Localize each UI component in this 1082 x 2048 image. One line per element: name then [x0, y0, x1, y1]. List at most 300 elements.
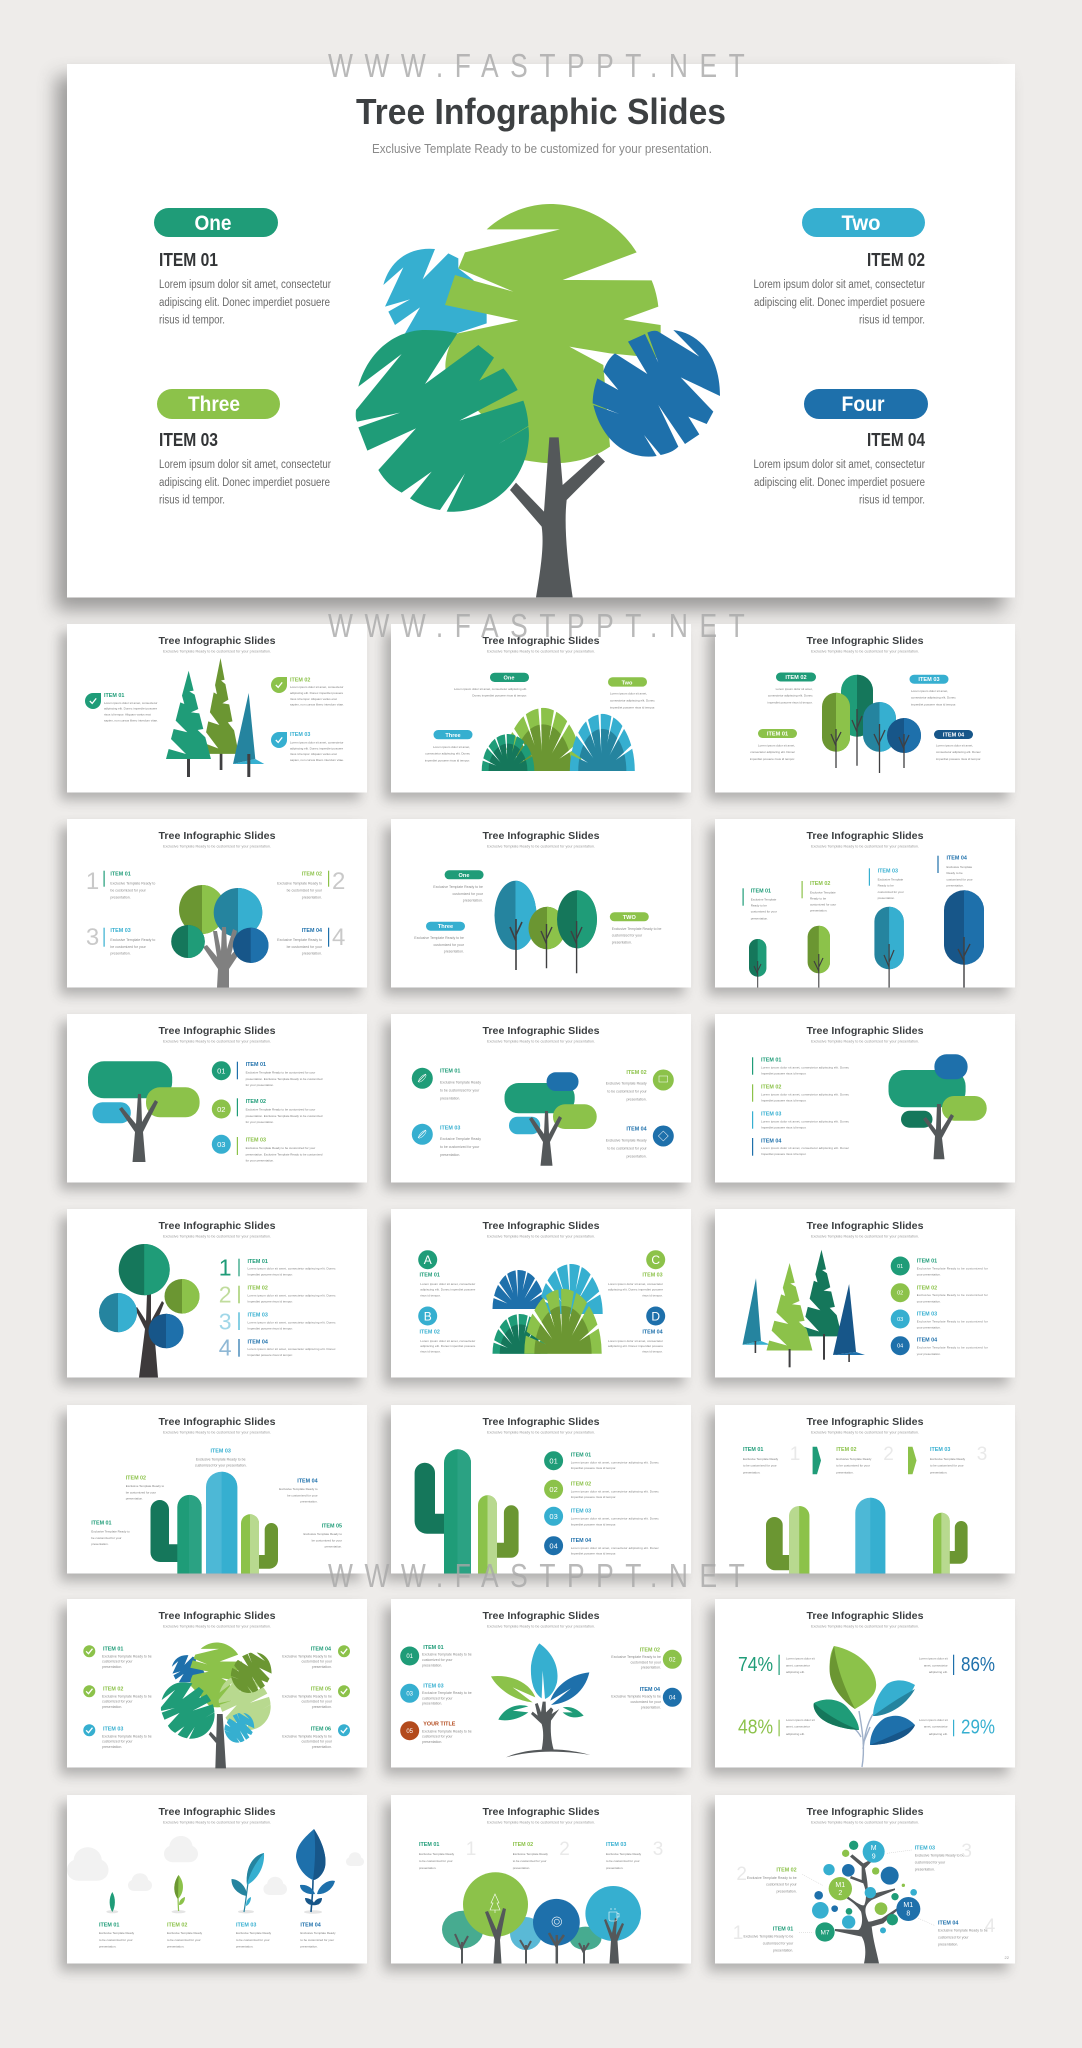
- stat 48%: 48%: [738, 1716, 773, 1738]
- item texts: presentation.: [878, 896, 895, 900]
- item 01: ITEM 01: [246, 1062, 266, 1068]
- items: 02: [897, 1291, 903, 1297]
- panel: slide 16 monstera tree six items: Tree Infographic Slides: [158, 1610, 276, 1622]
- item B: [418, 1306, 476, 1354]
- text: item 03: risus id tempor.: [159, 494, 225, 506]
- stat 29%: 29%: [961, 1716, 995, 1738]
- item 03: presentation.: [440, 1153, 460, 1157]
- item row: presentation.: [743, 1470, 761, 1474]
- item row: ITEM 01: [743, 1447, 763, 1453]
- bubble labels: 9: [872, 1854, 876, 1860]
- panel: slide 13 cactus five items: Tree Infographic Slides: [158, 1416, 276, 1428]
- item A: ITEM 01: [420, 1273, 440, 1279]
- stat 29%: [919, 1716, 995, 1738]
- numbered list: Imperdiet posuere risus id tempor.: [571, 1522, 616, 1526]
- item 01: Lorem ipsum dolor sit amet, consectetur: [104, 701, 157, 705]
- icon: clouds: [67, 1836, 364, 1895]
- panel: slide 9 item list with block tree: Exclusive Template Ready to be customized for your presentation.: [811, 1040, 919, 1044]
- item 02: sapien, non cursus libero interdum vitae.: [290, 702, 344, 706]
- items: [219, 1255, 336, 1360]
- item 04: to be customized for your: [607, 1146, 648, 1150]
- item 03: to be customized for your: [440, 1145, 480, 1149]
- item labels: 3: [653, 1839, 663, 1860]
- right items: ITEM 04: [311, 1647, 331, 1653]
- item 01: [733, 1923, 794, 1953]
- text: item 02: adipiscing elit. Donec imperdiet posuere: [754, 297, 925, 309]
- item 01: for your presentation.: [246, 1083, 274, 1087]
- items right: ITEM 02: [640, 1648, 660, 1654]
- items: 4: [219, 1334, 232, 1360]
- watermark top: WWW.FASTPPT.NET: [328, 48, 745, 85]
- text: item 04: Lorem ipsum dolor sit amet, consectetur: [754, 459, 925, 471]
- item 03: Lorem ipsum dolor sit amet, consectetur: [290, 740, 343, 744]
- left items: Exclusive Template Ready to be: [102, 1654, 152, 1658]
- panel: slide 3 four capsule trees: [715, 624, 1015, 792]
- items: ITEM 01: [91, 1521, 112, 1527]
- item 03: risus id tempor. Aliquam varius erat: [290, 752, 337, 756]
- numbered list: ITEM 01: [571, 1452, 591, 1458]
- item 04: Exclusive Template Ready: [606, 1138, 647, 1142]
- item 02: for your presentation.: [246, 1120, 274, 1124]
- numbered list: Lorem ipsum dolor sit amet, consectetur adipiscing elit. Donec: [571, 1489, 659, 1493]
- items right: customized for your: [630, 1700, 662, 1704]
- items: your presentation.: [917, 1299, 941, 1303]
- text two: consectetur adipiscing elit. Donec: [610, 698, 655, 702]
- stat 86%: 86%: [961, 1654, 995, 1676]
- stat 29%: amet, consectetur: [924, 1725, 948, 1729]
- body texts: consectetur adipiscing elit. Donec: [936, 750, 981, 754]
- stat 74%: Lorem ipsum dolor sit: [786, 1656, 815, 1660]
- icon: capsule trees: [822, 675, 921, 773]
- items: be customized for your: [91, 1536, 122, 1540]
- panel: slide 19 growing plants: Tree Infographic Slides: [158, 1806, 276, 1818]
- body texts: presentation.: [463, 899, 483, 903]
- text: item 01: adipiscing elit. Donec imperdiet posuere: [159, 297, 330, 309]
- connectors: [799, 1850, 935, 1933]
- items: Imperdiet posuere risus id tempor.: [248, 1273, 293, 1277]
- item 04: [606, 1126, 674, 1158]
- item 03: 03: [217, 1140, 225, 1149]
- items right: Exclusive Template Ready to be: [611, 1655, 661, 1659]
- numbered list: [544, 1451, 659, 1556]
- item row: 2: [883, 1444, 894, 1465]
- items: 01: [897, 1264, 903, 1270]
- item 03: 3: [86, 924, 99, 951]
- body texts: customized for your: [452, 892, 484, 896]
- panel: slide 17 hand tree with leaves: [391, 1599, 691, 1768]
- numbered list: Imperdiet posuere risus id tempor.: [571, 1552, 616, 1556]
- stat 74%: amet, consectetur: [786, 1664, 810, 1668]
- right items: Exclusive Template Ready to be: [282, 1694, 332, 1698]
- panel: slide 9 item list with block tree: [715, 1014, 1015, 1182]
- item 03: ITEM 03: [440, 1125, 460, 1131]
- pill: Four: Four: [842, 393, 884, 416]
- items: Exclusive Template Ready to be: [196, 1458, 246, 1462]
- item labels: presentation.: [513, 1866, 530, 1870]
- panel: slide 2 bushes with pills: Exclusive Template Ready to be customized for your presentation.: [487, 650, 595, 654]
- left items: Exclusive Template Ready to be: [102, 1734, 152, 1738]
- item labels: [99, 1922, 336, 1949]
- pill one: [490, 673, 529, 682]
- text: item 04: ITEM 04: [867, 430, 925, 450]
- page number: 22: [1004, 1955, 1010, 1960]
- item 03: adipiscing elit. Donec imperdiet posuere: [290, 746, 344, 750]
- panel: slide 8 block tree with icon circles: Tree Infographic Slides: [482, 1025, 600, 1037]
- items: ITEM 04: [297, 1478, 318, 1484]
- text: item 03: adipiscing elit. Donec imperdiet posuere: [159, 477, 330, 489]
- item C: ITEM 03: [642, 1273, 663, 1279]
- icon: circle tree: [99, 1244, 200, 1378]
- panel: slide 12 pines with circles: Tree Infographic Slides: [806, 1220, 924, 1232]
- item labels: Exclusive Template Ready: [300, 1931, 336, 1935]
- left items: presentation.: [102, 1705, 122, 1709]
- items left: 05: [406, 1729, 414, 1735]
- item list: Lorem ipsum dolor sit amet, consectetur adipiscing elit. Donec: [761, 1146, 850, 1150]
- item 02: Exclusive Template Ready: [606, 1082, 647, 1086]
- panel: slide 20 round trees with icons: Exclusive Template Ready to be customized for your presentation.: [487, 1820, 595, 1824]
- panel: slide 3 four capsule trees: Tree Infographic Slides: [806, 635, 924, 647]
- items: ITEM 03: [917, 1311, 937, 1317]
- item 01: risus id tempor. Aliquam varius erat: [104, 712, 151, 716]
- items right: ITEM 04: [640, 1687, 660, 1693]
- item 02: [606, 1070, 674, 1102]
- left items: ITEM 01: [103, 1647, 123, 1653]
- items right: customized for your: [630, 1660, 662, 1664]
- item labels: ITEM 04: [300, 1922, 321, 1928]
- panel: main tree slide: [67, 64, 1015, 598]
- item 03: [86, 924, 155, 956]
- items: be customized for your: [312, 1538, 342, 1542]
- item texts: presentation.: [810, 909, 828, 913]
- items: Exclusive Template Ready to: [91, 1530, 130, 1534]
- panel: slide 1 three pines with checks: Exclusive Template Ready to be customized for your presentation.: [163, 650, 271, 654]
- panel: slide 6 growing capsule trees: Exclusive Template Ready to be customized for your presentation.: [811, 844, 919, 848]
- text: item 02: [754, 250, 925, 326]
- panel: slide 20 round trees with icons: Tree Infographic Slides: [482, 1806, 600, 1818]
- items: Exclusive Template Ready to: [304, 1532, 342, 1536]
- panel: slide 10 circle tree with numerals: Exclusive Template Ready to be customized for your presentation.: [163, 1234, 271, 1238]
- subtitle: Exclusive Template Ready to be customized for your presentation.: [372, 141, 712, 156]
- items left: Exclusive Template Ready to be: [422, 1653, 472, 1657]
- pill: Three: [157, 389, 280, 419]
- item labels: to be customized for your: [513, 1859, 546, 1863]
- numbered list: ITEM 04: [571, 1538, 591, 1544]
- body texts: imperdiet posuere risus id tempor.: [750, 757, 795, 761]
- item 03: [271, 732, 344, 762]
- body texts: Exclusive Template Ready to be: [612, 927, 661, 931]
- panel: slide 18 leaves with percentages: Exclusive Template Ready to be customized for your presentation.: [811, 1624, 919, 1628]
- item 01: to be customized for your: [440, 1088, 480, 1092]
- pill: One: [154, 208, 278, 237]
- right items: ITEM 05: [311, 1687, 331, 1693]
- panel: slide 6 growing capsule trees: [715, 819, 1015, 988]
- item 04: presentation.: [302, 952, 322, 956]
- icon: monstera leaf tree: [356, 204, 720, 597]
- item 02: presentation.: [776, 1890, 797, 1894]
- text: item 02: ITEM 02: [867, 250, 925, 270]
- item D: ITEM 04: [642, 1329, 663, 1335]
- item labels: Exclusive Template Ready: [513, 1852, 548, 1856]
- icon: oval trees: [494, 881, 597, 973]
- item D: adipiscing elit. Donec imperdiet posuere: [608, 1344, 663, 1348]
- item row: to be customized for your: [743, 1463, 777, 1467]
- title: Tree Infographic Slides: [356, 91, 726, 132]
- items: 1: [219, 1255, 232, 1281]
- item 01: [412, 1068, 481, 1100]
- item B: Lorem ipsum dolor sit amet, consectetur: [420, 1339, 475, 1343]
- item C: adipiscing elit. Donec imperdiet posuere: [608, 1288, 663, 1292]
- text three: imperdiet posuere risus id tempor.: [425, 759, 470, 763]
- panel: slide 5 three oval trees: [391, 819, 691, 988]
- body texts: imperdiet posuere risus id tempor.: [936, 757, 981, 761]
- panel: slide 14 cactus with numbered list: Exclusive Template Ready to be customized for your presentation.: [487, 1430, 595, 1434]
- item 01: 01: [217, 1067, 225, 1076]
- item A: adipiscing elit. Donec imperdiet posuere: [420, 1288, 476, 1292]
- item 01: adipiscing elit. Donec imperdiet posuere: [104, 707, 158, 711]
- items right: presentation.: [641, 1705, 661, 1709]
- items: Lorem ipsum dolor sit amet, consectetur adipiscing elit. Donec: [248, 1321, 336, 1325]
- item 04: be customized for your: [287, 945, 323, 949]
- text: item 01: Lorem ipsum dolor sit amet, consectetur: [159, 279, 331, 291]
- body texts: Lorem ipsum dolor sit amet,: [936, 744, 973, 748]
- item 03: presentation.: [110, 952, 131, 956]
- stat 86%: amet, consectetur: [924, 1664, 948, 1668]
- icon: round trees: [442, 1872, 641, 1964]
- body texts: Lorem ipsum dolor sit amet,: [911, 689, 948, 693]
- stat 29%: Lorem ipsum dolor sit: [919, 1718, 948, 1722]
- items left: ITEM 01: [423, 1645, 444, 1651]
- item 04: ITEM 04: [302, 928, 322, 934]
- item 04: [277, 924, 345, 956]
- item row: Exclusive Template Ready: [743, 1457, 779, 1461]
- item D: Lorem ipsum dolor sit amet, consectetur: [608, 1339, 663, 1343]
- panel: slide 7 flat tree with numbered circles: Tree Infographic Slides: [158, 1025, 276, 1037]
- item texts: Ready to be: [878, 884, 894, 888]
- stat 48%: [738, 1716, 815, 1738]
- items: customized for your presentation.: [195, 1464, 247, 1468]
- panel: slide 20 round trees with icons: [391, 1795, 691, 1964]
- panel: slide 7 flat tree with numbered circles: Exclusive Template Ready to be customized for your presentation.: [163, 1040, 271, 1044]
- items: presentation.: [325, 1545, 342, 1549]
- item 04: ITEM 04: [938, 1920, 958, 1926]
- items: Imperdiet posuere risus id tempor.: [248, 1353, 293, 1357]
- panel: slide 21 circle bubble tree: Exclusive Template Ready to be customized for your presentation.: [811, 1820, 919, 1824]
- panel: slide 13 cactus five items: Exclusive Template Ready to be customized for your presentation.: [163, 1430, 271, 1434]
- panel: slide 12 pines with circles: [715, 1209, 1015, 1378]
- text three: consectetur adipiscing elit. Donec: [425, 752, 470, 756]
- item 04: 4: [332, 924, 345, 951]
- numbered list: Imperdiet posuere risus id tempor.: [571, 1466, 616, 1470]
- watermark lower: WWW.FASTPPT.NET: [328, 1558, 745, 1595]
- panel: slide 5 three oval trees: Exclusive Template Ready to be customized for your presentation.: [487, 844, 595, 848]
- item row: 3: [977, 1444, 987, 1465]
- stat 74%: 74%: [738, 1654, 773, 1676]
- items left: 03: [406, 1692, 414, 1698]
- icon: pines: [166, 658, 264, 777]
- item labels: ITEM 02: [513, 1842, 533, 1848]
- stat 74%: [738, 1654, 815, 1676]
- left items: customized for your: [102, 1740, 133, 1744]
- item labels: to be customized for your: [606, 1859, 640, 1863]
- items: ITEM 02: [917, 1285, 937, 1291]
- item 03: ITEM 03: [246, 1138, 266, 1144]
- icon: cactus: [415, 1449, 519, 1574]
- item 01: ITEM 01: [104, 693, 124, 699]
- text three: [425, 745, 470, 763]
- numbered list: Lorem ipsum dolor sit amet, consectetur adipiscing elit. Donec: [571, 1517, 659, 1521]
- body texts: Exclusive Template Ready to be: [433, 885, 483, 889]
- item row: to be customized for your: [836, 1463, 870, 1467]
- item 03: ITEM 03: [110, 928, 131, 934]
- items right: Exclusive Template Ready to be: [611, 1695, 661, 1699]
- item 01: customized for your: [763, 1942, 794, 1946]
- text two: imperdiet posuere risus id tempor.: [610, 705, 655, 709]
- panel: slide 5 three oval trees: Tree Infographic Slides: [482, 830, 600, 842]
- item labels: [419, 1839, 663, 1870]
- body texts: customized for your: [612, 934, 643, 938]
- pills: TWO: [623, 915, 636, 921]
- icon: plant 3: [231, 1853, 264, 1913]
- pills: ITEM 03: [918, 677, 940, 683]
- item 01: Exclusive Template Ready: [440, 1080, 481, 1084]
- bubble labels: M1: [835, 1882, 845, 1889]
- panel: slide 10 circle tree with numerals: Tree Infographic Slides: [158, 1220, 276, 1232]
- icon: pines: [742, 1250, 865, 1367]
- items: Imperdiet posuere risus id tempor.: [248, 1326, 293, 1330]
- item labels: ITEM 03: [606, 1842, 626, 1848]
- body texts: Lorem ipsum dolor sit amet,: [758, 744, 795, 748]
- items: Exclusive Template Ready to be customized for: [917, 1293, 988, 1297]
- item texts: Ready to be: [810, 896, 827, 900]
- text two: [610, 692, 655, 709]
- items: ITEM 03: [211, 1448, 231, 1454]
- item 04: customized for your: [938, 1935, 969, 1939]
- numbered list: Imperdiet posuere risus id tempor.: [571, 1495, 616, 1499]
- items left: presentation.: [422, 1740, 442, 1744]
- body texts: customized for your: [433, 943, 465, 947]
- item 02: ITEM 02: [776, 1868, 797, 1874]
- icon: round trees on grey trunk: [171, 885, 268, 988]
- pill three: Three: [445, 733, 461, 739]
- items: ITEM 05: [322, 1524, 342, 1530]
- item list: ITEM 04: [761, 1138, 781, 1144]
- items left: Exclusive Template Ready to be: [422, 1691, 472, 1695]
- panel: slide 18 leaves with percentages: Tree Infographic Slides: [806, 1610, 924, 1622]
- panel: slide 9 item list with block tree: Tree Infographic Slides: [806, 1025, 924, 1037]
- items: be customized for your: [126, 1490, 156, 1494]
- panel: slide 1 three pines with checks: [67, 624, 367, 792]
- item texts: ITEM 04: [946, 856, 967, 862]
- panel: slide 17 hand tree with leaves: Exclusive Template Ready to be customized for your presentation.: [487, 1624, 595, 1628]
- item 03: customized for your: [915, 1860, 946, 1864]
- items left: [400, 1645, 472, 1744]
- items: presentation.: [126, 1497, 143, 1501]
- item list: Lorem ipsum dolor sit amet, consectetur adipiscing elit. Donec: [761, 1120, 850, 1124]
- panel: slide 12 pines with circles: Exclusive Template Ready to be customized for your presentation.: [811, 1234, 919, 1238]
- panel: slide 8 block tree with icon circles: [391, 1014, 691, 1182]
- item labels: Exclusive Template Ready: [167, 1931, 203, 1935]
- left items: customized for your: [102, 1660, 133, 1664]
- item labels: ITEM 01: [99, 1922, 119, 1928]
- item labels: to be customized for your: [300, 1938, 334, 1942]
- item 01: [86, 868, 155, 899]
- text: item 03: Lorem ipsum dolor sit amet, consectetur: [159, 459, 331, 471]
- item labels: presentation.: [167, 1945, 185, 1949]
- panel: slide 2 bushes with pills: Tree Infographic Slides: [482, 635, 600, 647]
- item labels: to be customized for your: [419, 1859, 453, 1863]
- numbered list: 02: [549, 1485, 558, 1494]
- text: item 02: risus id tempor.: [859, 314, 925, 326]
- stat 74%: adipiscing elit.: [786, 1670, 805, 1674]
- item 01: ITEM 01: [773, 1927, 793, 1933]
- items: Exclusive Template Ready to: [126, 1484, 164, 1488]
- item labels: presentation.: [419, 1866, 437, 1870]
- icon: bushes: [492, 1264, 603, 1354]
- item 02: customized for your: [766, 1883, 798, 1887]
- body texts: consectetur adipiscing elit. Donec: [768, 694, 813, 698]
- item list: Imperdiet posuere risus id tempor.: [761, 1099, 807, 1103]
- text: item 01: ITEM 01: [159, 250, 218, 270]
- item labels: 2: [559, 1839, 570, 1860]
- right items: customized for your: [301, 1700, 333, 1704]
- item A: Lorem ipsum dolor sit amet, consectetur: [420, 1282, 475, 1286]
- panel: slide 11 bushes A B C D: Tree Infographic Slides: [482, 1220, 600, 1232]
- panel: slide 4 hand tree with numbers: Exclusive Template Ready to be customized for your presentation.: [163, 844, 271, 848]
- item labels: ITEM 01: [419, 1842, 439, 1848]
- item 02: presentation. Exclusive Template Ready to be customized: [246, 1114, 323, 1118]
- icon: cup: [609, 1908, 619, 1921]
- item texts: ITEM 02: [810, 881, 830, 887]
- item 03: Exclusive Template Ready to be: [915, 1854, 964, 1858]
- panel: slide 3 four capsule trees: Exclusive Template Ready to be customized for your presentation.: [811, 650, 919, 654]
- item A: A: [424, 1253, 432, 1267]
- panel: slide 21 circle bubble tree: Tree Infographic Slides: [806, 1806, 924, 1818]
- numbered list: 04: [549, 1542, 558, 1551]
- icon: small tree: [490, 1894, 500, 1913]
- numbered list: 03: [549, 1512, 558, 1521]
- bubble labels: M7: [820, 1930, 830, 1936]
- items: 04: [897, 1344, 903, 1350]
- items: Exclusive Template Ready to: [279, 1487, 318, 1491]
- item texts: Ready to be: [946, 871, 963, 875]
- panel: slide 18 leaves with percentages: [715, 1599, 1015, 1768]
- panel: slide 14 cactus with numbered list: Tree Infographic Slides: [482, 1416, 600, 1428]
- item row: ITEM 02: [836, 1447, 857, 1453]
- items: 03: [897, 1317, 903, 1323]
- item 01: be customized for your: [110, 889, 147, 893]
- item D: [608, 1306, 665, 1354]
- item 03: sapien, non cursus libero interdum vitae.: [290, 758, 344, 762]
- items left: ITEM 03: [423, 1683, 444, 1689]
- stat 48%: amet, consectetur: [786, 1725, 810, 1729]
- panel: slide 4 hand tree with numbers: Tree Infographic Slides: [158, 830, 276, 842]
- items: Imperdiet posuere risus id tempor.: [248, 1299, 293, 1303]
- icon: plant 2: [172, 1875, 186, 1913]
- item 02: adipiscing elit. Donec imperdiet posuere: [290, 691, 344, 695]
- item A: [418, 1250, 476, 1297]
- item 02: [277, 868, 345, 899]
- items: Exclusive Template Ready to be customized for: [917, 1266, 988, 1270]
- item C: risus id tempor.: [642, 1293, 663, 1297]
- item 03: for your presentation.: [246, 1159, 274, 1163]
- text: item 01: [159, 250, 331, 326]
- items: Lorem ipsum dolor sit amet, consectetur adipiscing elit. Donec: [248, 1267, 336, 1271]
- item labels: to be customized for your: [236, 1938, 270, 1942]
- item 03: Exclusive Template Ready to be customized for your: [246, 1146, 315, 1150]
- pill: Two: Two: [842, 212, 880, 235]
- items right: [611, 1648, 682, 1709]
- item 04: Exclusive Template Ready to: [277, 938, 322, 942]
